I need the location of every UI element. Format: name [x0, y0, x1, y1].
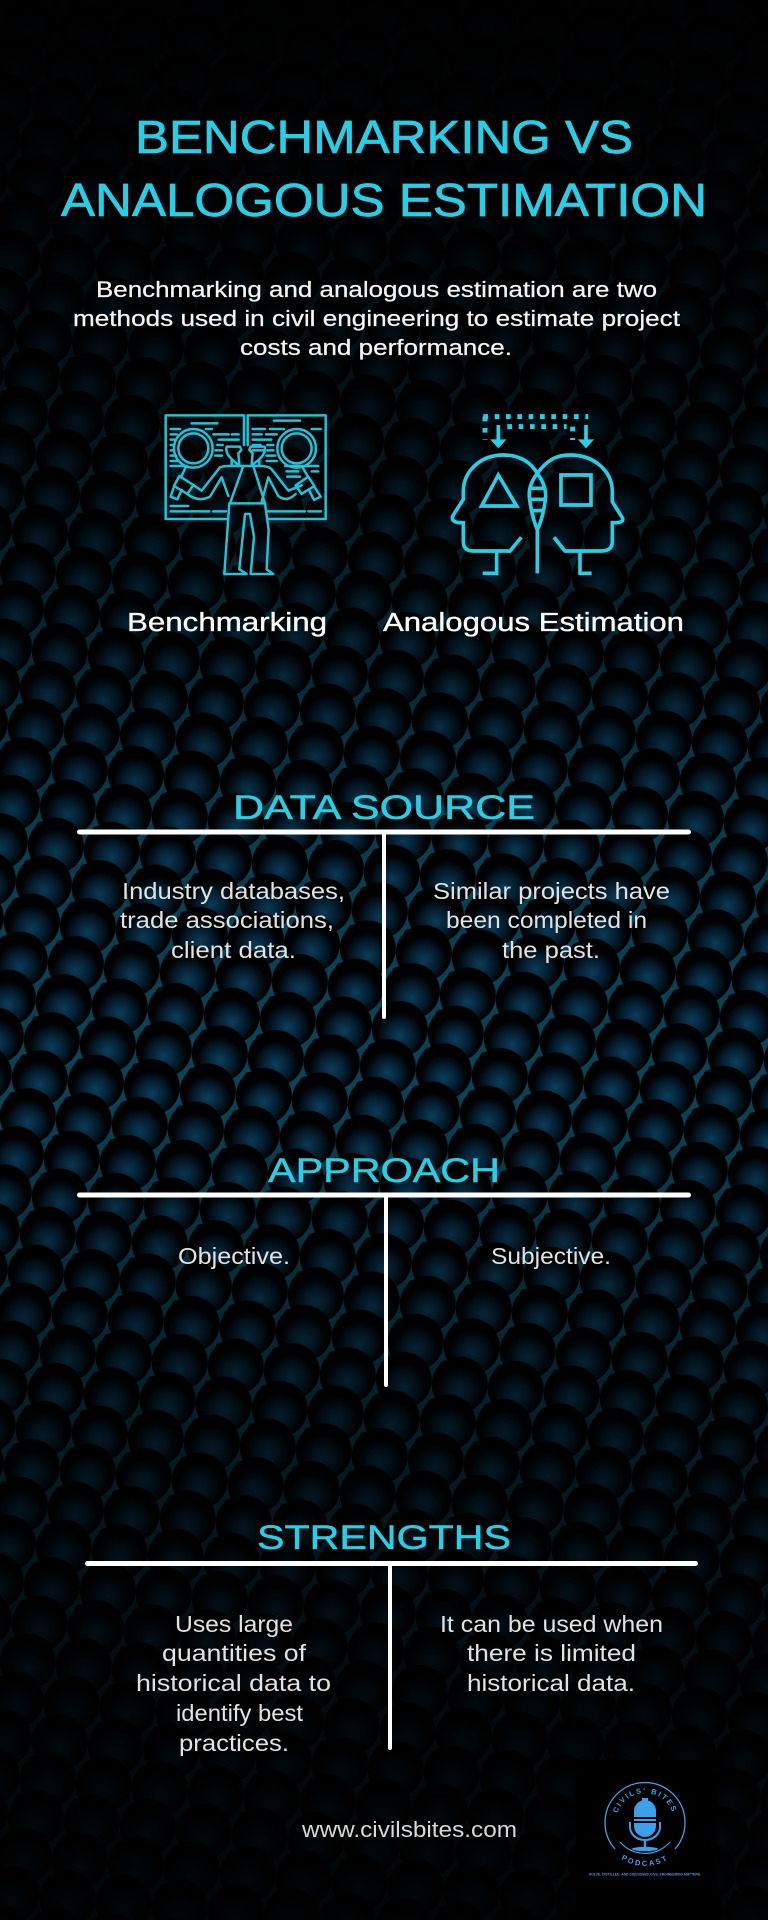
- benchmarking data source text: trade associations,: [120, 907, 334, 933]
- title: BENCHMARKING VS: [135, 111, 633, 163]
- analogous data source text: been completed in: [446, 907, 647, 933]
- analogous strengths text: there is limited: [467, 1640, 636, 1666]
- benchmarking strengths text: identify best: [176, 1700, 304, 1726]
- benchmarking strengths text: quantities of: [162, 1640, 307, 1666]
- analogous data source text: [433, 878, 670, 963]
- analogous data source text: Similar projects have: [433, 878, 670, 904]
- analogous strengths text: [440, 1611, 663, 1696]
- section: strengths: [85, 1519, 698, 1756]
- intro text: methods used in civil engineering to estimate project: [73, 306, 681, 331]
- logo: Civils' Bites podcast: SOLVE, DISTILLED, AND DISCUSSED CIVIL ENGINEERING MATTERS.: [589, 1872, 701, 1876]
- intro text: Benchmarking and analogous estimation are two: [96, 277, 657, 302]
- intro text: costs and performance.: [240, 335, 512, 360]
- logo: Civils' Bites podcast: PODCAST: [622, 1854, 666, 1866]
- heading: data source: DATA SOURCE: [233, 789, 535, 827]
- title: ANALOGOUS ESTIMATION: [61, 174, 707, 226]
- section: data source: [77, 789, 691, 1019]
- analogous strengths text: historical data.: [467, 1670, 635, 1696]
- label: Analogous Estimation: Analogous Estimation: [383, 609, 684, 637]
- website url: www.civilsbites.com: [301, 1817, 517, 1842]
- intro text: [73, 277, 681, 360]
- analogous approach text: Subjective.: [491, 1243, 611, 1269]
- analogous data source text: the past.: [502, 937, 600, 963]
- benchmarking approach text: Objective.: [178, 1243, 290, 1269]
- heading: approach: APPROACH: [268, 1152, 500, 1190]
- section: approach: [77, 1152, 691, 1387]
- label: Benchmarking: Benchmarking: [127, 609, 327, 637]
- heading: strengths: STRENGTHS: [257, 1519, 511, 1557]
- benchmarking strengths text: practices.: [179, 1730, 289, 1756]
- benchmarking data source text: [120, 878, 345, 963]
- benchmarking strengths text: Uses large: [175, 1611, 293, 1637]
- icon: two heads comparing shapes: [452, 417, 623, 573]
- benchmarking strengths text: historical data to: [136, 1670, 331, 1696]
- icon: microphone: [630, 1798, 660, 1851]
- logo: Civils' Bites podcast: [589, 1782, 701, 1876]
- benchmarking strengths text: [136, 1611, 331, 1756]
- title: [61, 111, 707, 226]
- analogous strengths text: It can be used when: [440, 1611, 663, 1637]
- logo: Civils' Bites podcast: CIVILS' BITES: [613, 1788, 676, 1812]
- benchmarking data source text: Industry databases,: [122, 878, 345, 904]
- benchmarking data source text: client data.: [171, 937, 296, 963]
- icon: person comparing documents with magnifiers: [166, 415, 326, 574]
